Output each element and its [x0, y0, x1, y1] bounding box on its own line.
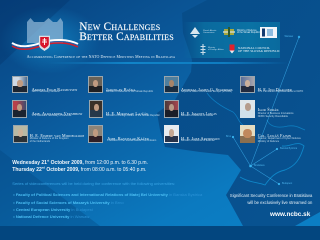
dates	[12, 159, 148, 173]
speaker: Lajčák: H. E. Miroslav Lajčák	[106, 111, 149, 116]
speaker: Káčer: President of the Slovak Atlantic Commission	[107, 139, 156, 142]
partner logos: NATIONAL COUNCIL	[238, 46, 270, 50]
header stripe	[0, 62, 320, 64]
videoconference note: Series of videoconferences will be held during the conference with the following universities:	[12, 181, 175, 186]
partner logos: of the Slovak Republic	[237, 32, 260, 34]
speaker: Lajčák: Minister of Foreign Affairs of the Slovak Republic	[106, 114, 160, 117]
speaker: Fajmn: Ministry of Defence	[258, 140, 279, 143]
dates: Thursday 22nd October 2009, from 08:00 a.m. to 05:40 p.m.	[12, 167, 146, 173]
title: New Challenges	[79, 21, 160, 33]
speaker: Arvidsson: Minister of Defence of Estonia	[181, 139, 214, 142]
list of universities: • Faculty of Political Sciences and International Relations of Matej Bel University in Banska Bystrica	[13, 192, 202, 197]
speaker: van Middelkoop: of the Netherlands	[30, 140, 50, 143]
subtitle: Accompanying Conference of the NATO Defence Ministers Meeting in Bratislava	[27, 54, 175, 59]
speaker: Šurák: NCBC Security Roundtable	[258, 115, 288, 118]
speaker: Baška	[88, 76, 153, 93]
speaker: Rasmussen	[12, 76, 78, 93]
speaker: van Middelkoop: Minister of Defence of the Kingdom	[30, 137, 69, 140]
speaker: Daalder: U.S. Permanent Representative to NATO	[258, 90, 303, 93]
speaker: Lieģis: Minister of Defence of Latvia	[181, 114, 213, 117]
website: www.ncbc.sk	[270, 211, 310, 218]
list of universities: • Central European University in Budapest	[13, 207, 93, 212]
speaker: Daalder	[240, 76, 304, 93]
map city labels: Bratislava	[254, 164, 264, 167]
map city labels: Brno	[226, 135, 231, 138]
streaming note: will be exclusively live streamed on	[247, 200, 312, 204]
title: Better Capabilities	[79, 31, 174, 43]
partner logos: Slovak Atlantic	[203, 30, 217, 32]
streaming note	[230, 192, 312, 205]
speaker: Rasmussen: NATO Secretary General	[32, 90, 59, 93]
speaker: Stavridis	[164, 76, 233, 93]
partner logos: Commission	[203, 32, 214, 34]
speaker: Lajčák	[89, 100, 160, 118]
map city labels: Banská Bystrica	[280, 147, 297, 150]
map city labels: Warsaw	[284, 35, 293, 38]
speaker: Baška: Jaroslav Baška	[106, 87, 136, 92]
partner logos: OF THE SLOVAK REPUBLIC	[238, 49, 280, 53]
title	[79, 21, 174, 43]
speaker: Šurák: Director of Business Innovations	[258, 112, 294, 115]
speaker: Šurák: Igor Šurák	[258, 107, 279, 112]
list of universities: • National Defence University in Warsaw	[13, 214, 89, 219]
dates: Wednesday 21st October 2009, from 12:00 p.m. to 6.30 p.m.	[12, 159, 148, 166]
partner logos: of Foreign Affairs	[208, 49, 224, 51]
speaker: van Middelkoop: H. E. Eimert van Middelkoop	[30, 133, 84, 138]
partner logos	[190, 27, 280, 55]
speaker: Šurák	[240, 100, 294, 118]
speaker: Baška: Minister of Defence of the Slovak Republic	[106, 90, 153, 93]
list of universities	[13, 192, 202, 219]
speaker: Stavridis: Supreme Allied Commander Europe (SHAPE)	[181, 90, 232, 93]
map city labels: Budapest	[282, 182, 292, 185]
speaker: Arvidsson	[164, 125, 220, 143]
speaker: Rasmussen: Anders Fogh Rasmussen	[32, 87, 77, 92]
speaker: Lieģis: H. E. Imants Lieģis	[181, 111, 217, 116]
speaker: Lieģis	[164, 100, 217, 118]
speaker: Fajmn: Director, Department of Cyber Defence	[258, 137, 301, 140]
streaming note: Significant Security Conference in Bratislava	[230, 192, 312, 198]
speaker: Arvidsson: H. E. Jose Arvidsson	[181, 136, 220, 141]
map city labels	[226, 35, 297, 185]
partner logos: Ministry of Defence	[237, 30, 257, 32]
logo panel	[183, 22, 280, 58]
list of universities: • Faculty of Social Sciences of Masaryk University in Brno	[13, 200, 124, 205]
speaker: Fajmn: Col. Lukáš Fajmn	[258, 133, 291, 138]
partner logos: Ministry	[208, 46, 215, 48]
speaker: Vershbow	[12, 100, 83, 118]
speaker: Fajmn	[240, 125, 301, 143]
emblem: castle and Slovak ribbon	[12, 18, 78, 51]
speaker: Káčer: Amb. Rastislav Káčer	[107, 136, 149, 141]
speaker: van Middelkoop	[13, 125, 84, 143]
speaker: Vershbow: Amb. Alexander Vershbow	[32, 111, 83, 116]
speaker: Stavridis: Admiral James G. Stavridis	[181, 87, 233, 92]
speaker: Káčer	[88, 125, 156, 143]
speaker: Daalder: H. E. Ivo Daalder	[258, 87, 292, 92]
speaker: Vershbow: U.S. Assistant Secretary of Defense	[32, 114, 71, 117]
